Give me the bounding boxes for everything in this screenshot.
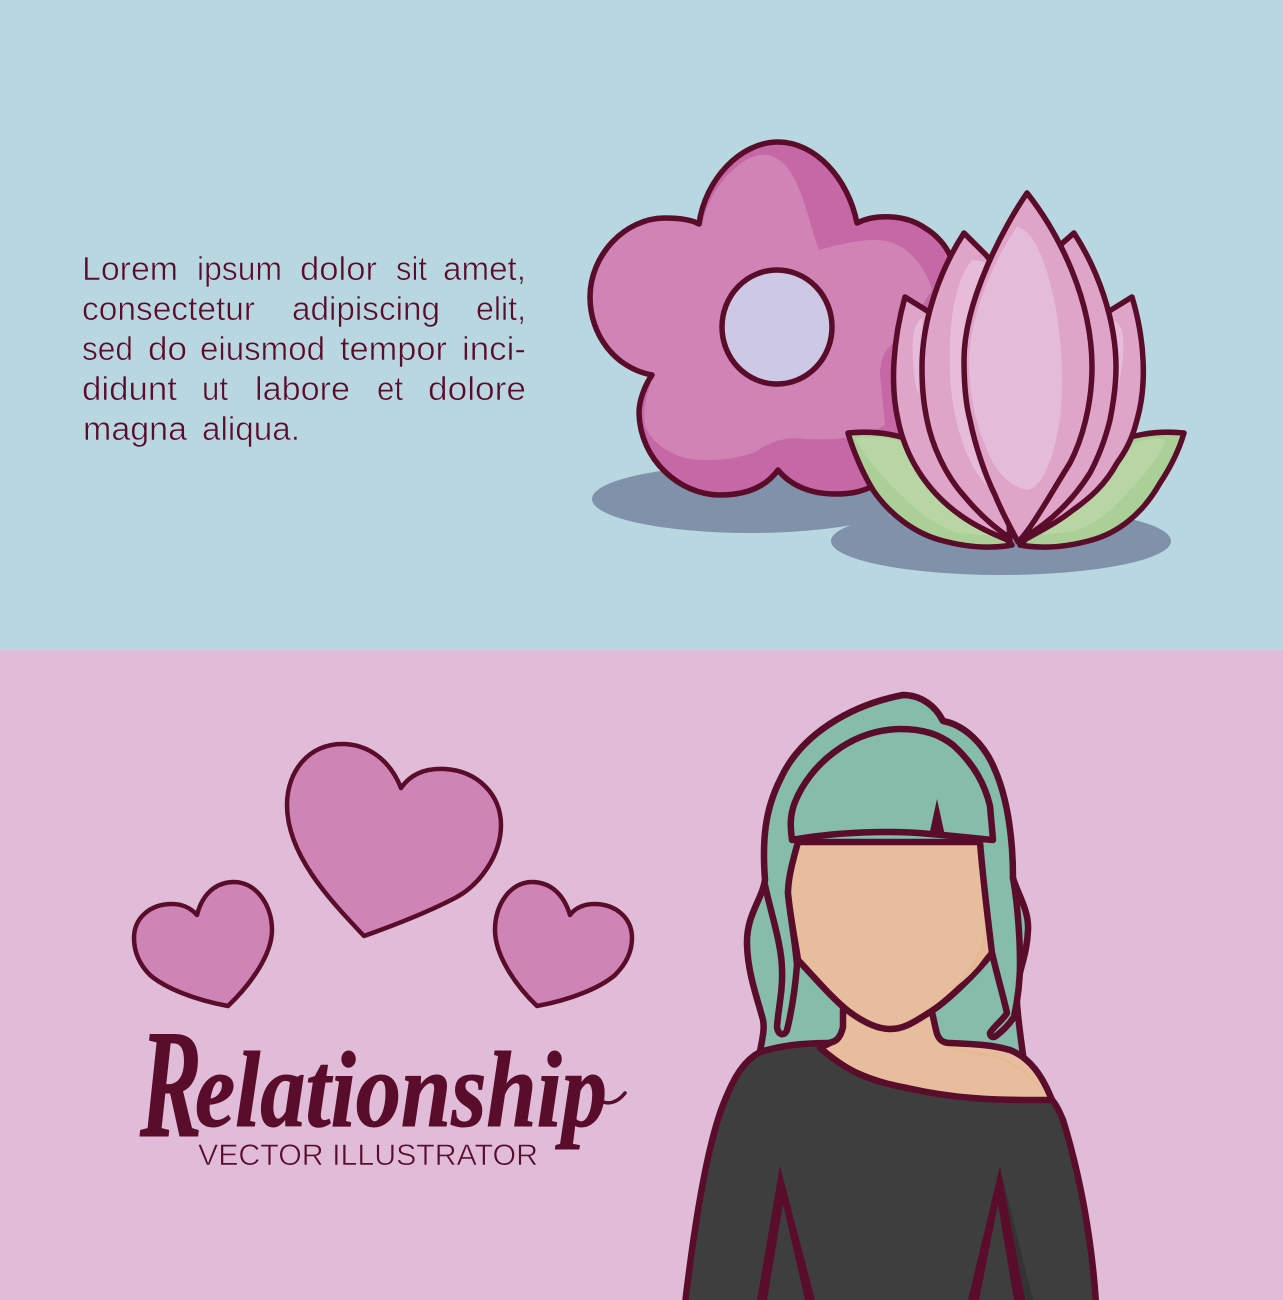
text block: lorem ipsum paragraph: adipiscing: [292, 290, 440, 327]
text block: lorem ipsum paragraph: sit: [396, 250, 427, 287]
title: Relationship: R: [139, 998, 202, 1170]
middle right petal: [1025, 233, 1116, 537]
icon: woman avatar: [685, 695, 1096, 1300]
right hair lock: [990, 878, 1020, 1037]
face: [788, 842, 992, 1029]
center heart: [287, 744, 501, 936]
text block: lorem ipsum paragraph: consectetur: [82, 290, 255, 327]
icon: three hearts: [134, 744, 632, 1006]
icon: lotus: [848, 193, 1184, 547]
left leaf: [848, 432, 1012, 547]
left hair lock: [765, 885, 797, 1034]
text block: lorem ipsum paragraph: eiusmod: [200, 330, 325, 367]
subtitle: vector illustrator: VECTOR ILLUSTRATOR: [198, 1139, 538, 1172]
bangs: [791, 729, 993, 840]
text block: lorem ipsum paragraph: [82, 250, 526, 447]
text block: lorem ipsum paragraph: ipsum: [197, 250, 282, 287]
title: Relationship: [139, 998, 625, 1170]
sweater: [685, 1043, 1096, 1300]
text block: lorem ipsum paragraph: dolor: [300, 250, 377, 287]
text block: lorem ipsum paragraph: dolore: [428, 370, 526, 407]
sweater left arm line: [757, 1166, 815, 1300]
right leaf: [1020, 432, 1184, 547]
icon: flower and lotus illustration: [590, 142, 1184, 575]
right heart: [495, 882, 632, 1006]
text block: lorem ipsum paragraph: labore: [255, 370, 350, 407]
back hair: [747, 695, 1028, 1062]
text block: lorem ipsum paragraph: didunt: [82, 370, 177, 407]
text block: lorem ipsum paragraph: elit,: [476, 290, 526, 327]
bangs notch: [929, 799, 945, 836]
face shade: [950, 925, 987, 990]
text block: lorem ipsum paragraph: tempor: [340, 330, 447, 367]
flower shadow: [592, 465, 908, 533]
sweater right shade: [1002, 1175, 1033, 1300]
neck and shoulder skin: [820, 1000, 1052, 1102]
icon: five petal flower: [590, 142, 957, 495]
title: Relationship: elationship: [195, 1031, 607, 1150]
outer left petal: [894, 297, 1010, 541]
left heart: [134, 882, 272, 1006]
text block: lorem ipsum paragraph: magna: [83, 410, 188, 447]
outer right petal: [1028, 297, 1143, 538]
text block: lorem ipsum paragraph: sed: [82, 330, 133, 367]
center petal: [964, 193, 1092, 542]
flower center: [722, 270, 832, 384]
shoulder shade: [936, 1035, 1045, 1095]
text block: lorem ipsum paragraph: do: [148, 330, 187, 367]
text block: lorem ipsum paragraph: ut: [202, 370, 228, 407]
text block: lorem ipsum paragraph: et: [377, 370, 403, 407]
text block: lorem ipsum paragraph: Lorem: [82, 250, 178, 287]
text block: lorem ipsum paragraph: amet,: [443, 250, 526, 287]
text block: lorem ipsum paragraph: aliqua.: [202, 410, 300, 447]
lotus shadow: [831, 507, 1171, 575]
panel: bottom pink background: [0, 650, 1283, 1300]
neck outline: [822, 1010, 1052, 1100]
sweater right arm line: [968, 1166, 1025, 1300]
middle left petal: [922, 233, 1010, 538]
panel: top blue background: [0, 0, 1283, 650]
text block: lorem ipsum paragraph: inci-: [462, 330, 526, 367]
